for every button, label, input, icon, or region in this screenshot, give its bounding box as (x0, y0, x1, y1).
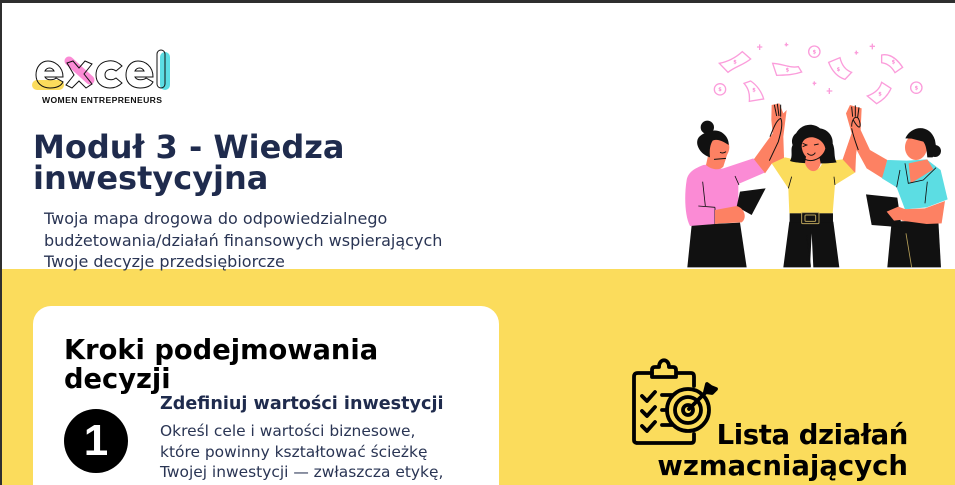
yellow background panel (0, 269, 955, 485)
woman right in blue shirt (843, 105, 948, 267)
heading: list of strengthening actions: wzmacniających (657, 450, 908, 482)
icon: number 1 badge: 1 (84, 416, 108, 465)
subtitle text: Twoje decyzje przedsiębiorcze (44, 252, 285, 271)
subtitle text (44, 209, 442, 271)
icon: floating banknotes and coins: $ (878, 92, 882, 98)
icon: floating banknotes and coins: $ (733, 60, 737, 66)
heading: decision steps: decyzji (64, 364, 171, 395)
icon: floating banknotes and coins (714, 43, 922, 104)
woman middle in yellow shirt (770, 125, 857, 267)
icon: floating banknotes and coins: $ (915, 85, 919, 91)
top edge bar (0, 0, 955, 3)
step 1 heading: Zdefiniuj wartości inwestycji (160, 394, 444, 414)
title: inwestycyjna (33, 159, 268, 197)
icon: floating banknotes and coins: $ (837, 67, 841, 73)
woman left in pink shirt (685, 103, 787, 267)
left edge bar (0, 0, 2, 485)
title (33, 128, 344, 197)
subtitle text: Twoja mapa drogowa do odpowiedzialnego (44, 209, 387, 228)
step 1 text (160, 422, 443, 481)
icon: number 1 badge (64, 409, 128, 473)
panel: decision steps (33, 306, 499, 485)
heading: list of strengthening actions (657, 419, 908, 482)
step 1 text: Określ cele i wartości biznesowe, (160, 422, 415, 440)
heading: decision steps (64, 335, 378, 395)
heading: list of strengthening actions: Lista działań (717, 419, 908, 451)
icon: floating banknotes and coins: $ (752, 88, 756, 94)
title: Moduł 3 - Wiedza (33, 128, 344, 166)
icon: clipboard checklist with target (632, 358, 718, 445)
icon: floating banknotes and coins: $ (718, 87, 722, 93)
step 1 text: które powinny kształtować ścieżkę (160, 443, 427, 461)
icon: floating banknotes and coins: $ (892, 59, 896, 65)
illustration: money and three women high-fiving (685, 42, 948, 268)
logo: excel women entrepreneurs (32, 50, 170, 105)
step 1 text: Twojej inwestycji — zwłaszcza etykę, (160, 463, 443, 481)
icon: floating banknotes and coins: $ (813, 49, 817, 55)
logo: excel women entrepreneurs: WOMEN ENTREPRENEURS (42, 95, 162, 105)
icon: floating banknotes and coins: $ (786, 68, 790, 74)
subtitle text: budżetowania/działań finansowych wspierających (44, 230, 442, 250)
heading: decision steps: Kroki podejmowania (64, 335, 378, 366)
